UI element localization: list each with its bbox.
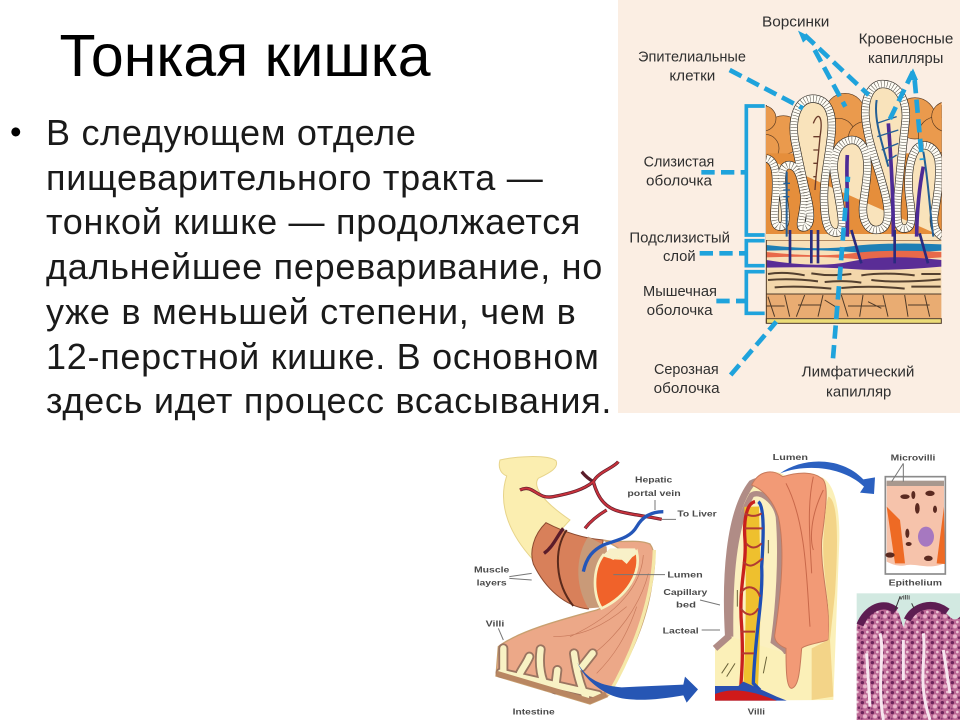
diagram labels: Эпителиальные [638, 49, 746, 65]
text block: тонкой кишке — продолжается [46, 201, 581, 242]
lacteal [750, 507, 753, 700]
diagram labels [629, 14, 953, 400]
labels: Microvilli [891, 453, 935, 463]
diagram labels: Слизистая [644, 154, 714, 170]
labels: Muscle [474, 564, 510, 574]
blue arrow [780, 461, 875, 494]
capillary net [722, 502, 768, 690]
diagram labels: капилляр [826, 384, 891, 400]
yellow tube [499, 457, 570, 560]
labels: Villi [748, 707, 765, 717]
capillaries inside villi [783, 100, 933, 237]
tan ring [578, 537, 610, 608]
villi fold [501, 648, 598, 697]
text block: здесь идет процесс всасывания. [46, 380, 612, 421]
diagram labels: Мышечная [643, 284, 717, 300]
villi [766, 80, 942, 240]
labels: portal vein [627, 488, 681, 498]
labels: bed [676, 600, 696, 610]
text block [46, 112, 612, 421]
labels: To Liver [677, 509, 717, 519]
labels: Epithelium [889, 577, 942, 587]
panel: single villus and epithelium [715, 452, 960, 720]
diagram labels: Ворсинки [762, 14, 829, 30]
vessels crossing the layers [790, 230, 928, 263]
leader lines [700, 35, 922, 375]
labels: Intestine [513, 707, 555, 717]
brackets [746, 106, 765, 313]
labels: layers [477, 578, 507, 588]
text block: пищеварительного тракта — [46, 157, 543, 198]
labels: villi [899, 595, 910, 601]
text block: В следующем отделе [46, 112, 417, 153]
labels: Lumen [773, 452, 808, 462]
labels: Lacteal [663, 626, 699, 636]
diagram labels: оболочка [647, 303, 714, 319]
villus body [715, 472, 839, 701]
diagram labels: клетки [669, 69, 715, 85]
labels [748, 452, 942, 717]
panel: intestinal wall cross-section [618, 0, 960, 413]
diagram labels: Подслизистый [629, 230, 730, 246]
micrograph [857, 593, 960, 720]
text block: 12-перстной кишке. В основном [46, 336, 600, 377]
labels: Villi [486, 619, 504, 629]
labels: Capillary [663, 587, 708, 597]
bullet: • [10, 113, 22, 150]
diagram labels: Серозная [654, 362, 719, 378]
diagram labels: оболочка [646, 173, 713, 189]
top diagram and lower diagrams [474, 0, 960, 720]
mucosal sheet [496, 540, 655, 704]
blue arrow [577, 663, 698, 703]
vessels [520, 462, 662, 553]
diagram labels: Кровеносные [859, 32, 953, 48]
text block: уже в меньшей степени, чем в [46, 291, 576, 332]
panel: intestine cutaway [474, 457, 720, 717]
title: Тонкая кишка [60, 23, 431, 89]
diagram labels: капилляры [868, 51, 943, 67]
lumen [595, 552, 638, 608]
base vessels [715, 682, 787, 701]
diagram labels: слой [663, 249, 696, 265]
labels: Hepatic [635, 474, 673, 484]
diagram labels: оболочка [654, 381, 721, 397]
text block: дальнейшее переваривание, но [46, 246, 603, 287]
arrowheads [798, 31, 918, 80]
epithelium box [885, 477, 945, 574]
muscle band [532, 523, 603, 609]
diagram labels: Лимфатический [802, 364, 914, 380]
wall layers [766, 105, 941, 323]
labels: Lumen [667, 570, 703, 580]
labels [474, 474, 717, 717]
